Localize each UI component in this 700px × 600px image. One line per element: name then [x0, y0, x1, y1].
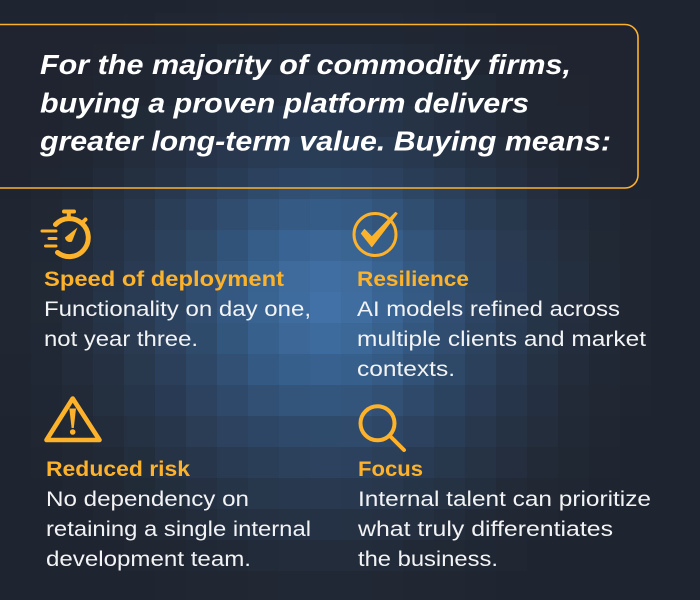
item: focus [357, 406, 651, 571]
text: focus: what truly differentiates [357, 517, 613, 541]
text: resilience: contexts. [357, 357, 455, 381]
headline text [39, 49, 611, 156]
icon: warning triangle [46, 398, 100, 440]
text: reduced risk: No dependency on [46, 487, 249, 511]
text: focus [357, 457, 651, 571]
headline panel [0, 24, 638, 188]
item: reduced risk [46, 398, 311, 571]
headline text: greater long-term value. Buying means: [39, 126, 611, 156]
text: reduced risk: development team. [46, 547, 251, 571]
text: reduced risk [46, 457, 311, 571]
headline text: For the majority of commodity firms, [40, 49, 571, 80]
icon: check in circle [354, 212, 397, 256]
headline text: buying a proven platform delivers [40, 88, 529, 118]
icon: stopwatch [42, 212, 88, 257]
text: resilience: Resilience [357, 267, 469, 291]
text: focus: the business. [358, 547, 498, 571]
text: resilience: multiple clients and market [357, 327, 646, 351]
text: resilience [357, 267, 646, 381]
icon: magnifier [360, 406, 404, 450]
text: reduced risk: Reduced risk [46, 457, 190, 481]
text: resilience: AI models refined across [357, 297, 620, 321]
text: focus: Internal talent can prioritize [358, 487, 651, 511]
text: speed of deployment [44, 267, 311, 351]
item: speed of deployment [42, 212, 311, 351]
text: speed of deployment: not year three. [44, 327, 198, 351]
text: speed of deployment: Functionality on day one, [44, 297, 311, 321]
text: speed of deployment: Speed of deployment [44, 267, 284, 291]
text: focus: Focus [358, 457, 423, 481]
item: resilience [354, 212, 646, 381]
text: reduced risk: retaining a single internal [46, 517, 311, 541]
